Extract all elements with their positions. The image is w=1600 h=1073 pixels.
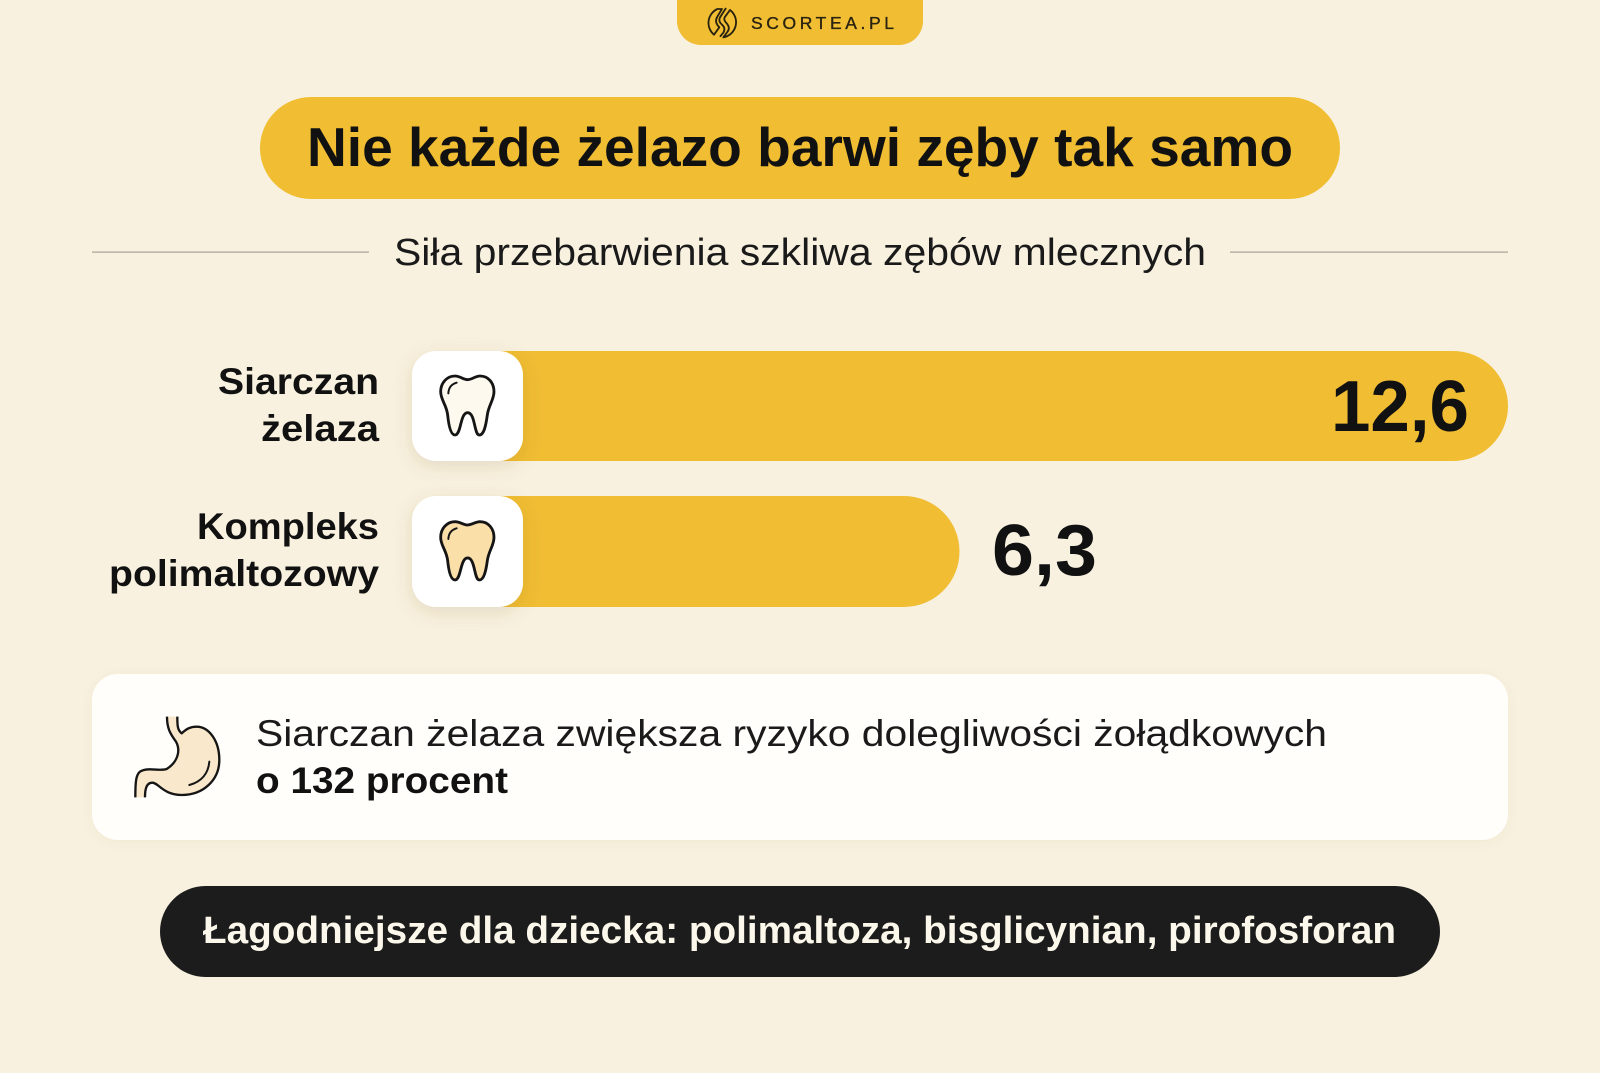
bottom pill text: Łagodniejsze dla dziecka: polimaltoza, bisglicynian, pirofosforan bbox=[203, 910, 1396, 952]
bar row: kompleks polimaltozowy bbox=[109, 496, 1097, 607]
bar row: siarczan żelaza bbox=[218, 351, 1508, 461]
bar: 12,6 bbox=[480, 351, 1508, 461]
logo badge bbox=[677, 0, 923, 45]
title pill bbox=[260, 97, 1340, 199]
label: kompleks polimaltozowy: Kompleks bbox=[197, 506, 379, 547]
callout text bbox=[256, 713, 1327, 801]
title: Nie każde żelazo barwi zęby tak samo bbox=[307, 116, 1293, 178]
label: siarczan żelaza: żelaza bbox=[261, 408, 379, 449]
label: siarczan żelaza: Siarczan bbox=[218, 361, 379, 402]
icon: white tooth bbox=[412, 351, 523, 461]
icon: logo mark bbox=[708, 8, 736, 37]
logo text: SCORTEA.PL bbox=[751, 13, 894, 33]
callout text: o 132 procent bbox=[256, 760, 508, 801]
bottom pill bbox=[160, 886, 1440, 977]
label: kompleks polimaltozowy bbox=[109, 506, 379, 594]
callout card: stomach risk bbox=[92, 674, 1508, 840]
label: siarczan żelaza bbox=[218, 361, 379, 449]
icon: stomach bbox=[135, 717, 219, 797]
subtitle: Siła przebarwienia szkliwa zębów mlecznych bbox=[394, 232, 1206, 274]
bar: 6,3 bbox=[480, 496, 960, 607]
value: 12,6: 12,6 bbox=[1331, 367, 1469, 447]
value: 6,3: 6,3 bbox=[992, 511, 1097, 591]
icon: yellowed tooth bbox=[412, 496, 523, 607]
callout text: Siarczan żelaza zwiększa ryzyko dolegliwości żołądkowych bbox=[256, 713, 1327, 754]
label: kompleks polimaltozowy: polimaltozowy bbox=[109, 553, 379, 594]
